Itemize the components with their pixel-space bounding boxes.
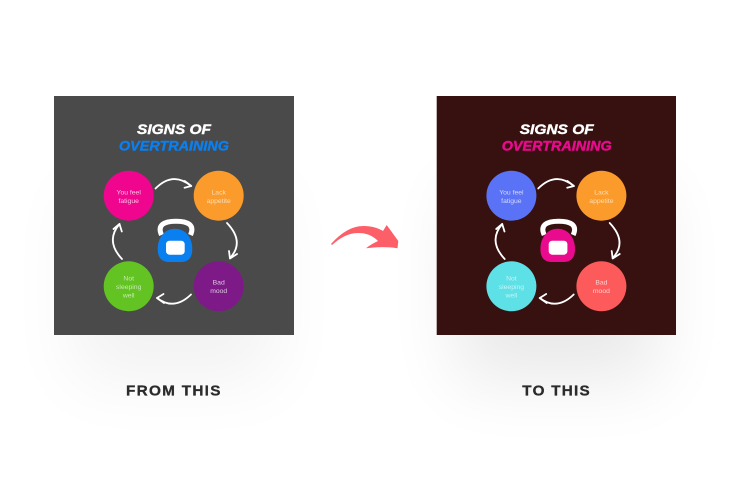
label: from this: FROM THIS <box>126 384 222 400</box>
heading: signs of overtraining: OVERTRAINING <box>119 138 229 154</box>
circle: not sleeping well <box>104 261 154 311</box>
circle: bad mood: mood <box>593 288 610 295</box>
circle: you feel fatigue: fatigue <box>501 198 522 205</box>
circle: not sleeping well <box>486 261 536 311</box>
heading: signs of overtraining <box>119 122 229 154</box>
circle: lack appetite <box>576 171 626 221</box>
circle: not sleeping well: Not <box>123 276 134 282</box>
label: to this: TO THIS <box>522 384 591 400</box>
panel: to this <box>437 96 676 335</box>
circle: you feel fatigue <box>104 171 154 221</box>
circle: not sleeping well: well <box>505 292 518 300</box>
circle: you feel fatigue: You feel <box>499 190 524 196</box>
panel: from this <box>54 96 294 335</box>
arrows: cycle <box>496 179 620 304</box>
circle: you feel fatigue: fatigue <box>118 198 139 205</box>
circle: bad mood <box>194 261 244 311</box>
circle: not sleeping well: Not <box>506 276 517 282</box>
circle: you feel fatigue: You feel <box>117 190 141 196</box>
circle: lack appetite: Lack <box>594 190 609 196</box>
icon: kettlebell <box>540 221 575 262</box>
circle: not sleeping well: sleeping <box>499 284 524 291</box>
circle: lack appetite: appetite <box>207 198 231 205</box>
circle: bad mood: Bad <box>595 280 608 286</box>
circle: bad mood <box>576 261 626 311</box>
arrow: from this to this <box>331 225 398 248</box>
circle: lack appetite: appetite <box>589 198 614 205</box>
heading: signs of overtraining: OVERTRAINING <box>502 138 612 154</box>
heading: signs of overtraining <box>502 122 612 154</box>
circle: not sleeping well: well <box>122 292 135 300</box>
circle: lack appetite <box>194 171 244 221</box>
icon: kettlebell <box>158 221 192 262</box>
arrows: cycle <box>113 179 237 304</box>
circle: lack appetite: Lack <box>212 190 226 196</box>
circle: bad mood: Bad <box>213 280 225 286</box>
circle: you feel fatigue <box>486 171 536 221</box>
heading: signs of overtraining: SIGNS OF <box>520 122 594 138</box>
heading: signs of overtraining: SIGNS OF <box>137 122 211 138</box>
circle: bad mood: mood <box>210 288 227 295</box>
circle: not sleeping well: sleeping <box>116 284 142 291</box>
